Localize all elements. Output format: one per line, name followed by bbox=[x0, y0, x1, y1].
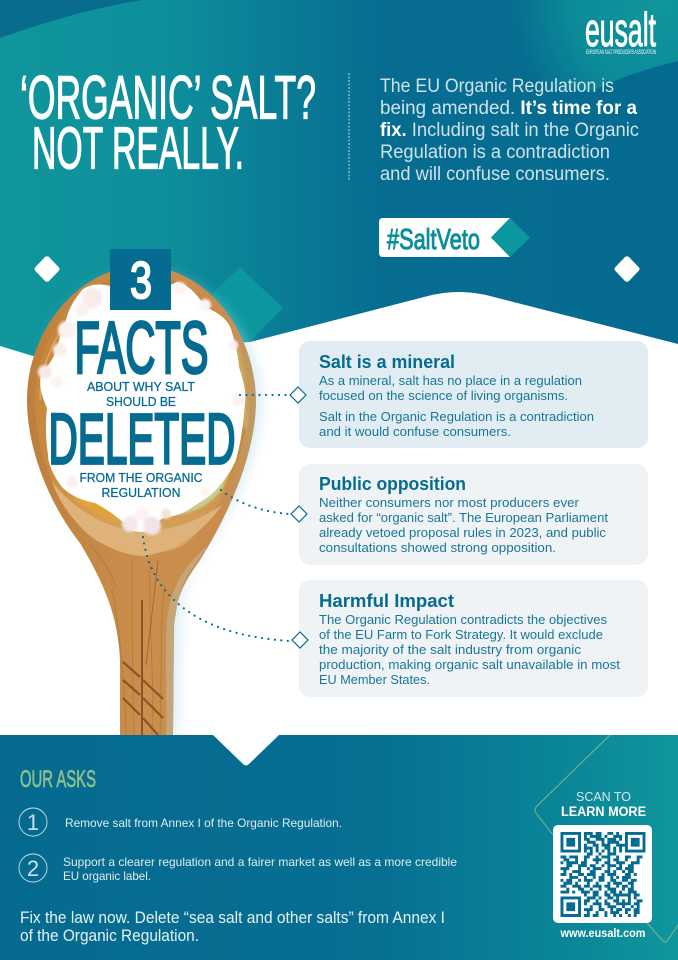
scan to learn more bbox=[561, 789, 646, 819]
icon: white diamond left bbox=[34, 256, 60, 282]
panel: public opposition: already vetoed proposal rules in 2023, and public bbox=[319, 526, 606, 540]
title: ‘ORGANIC’ SALT? bbox=[20, 64, 316, 132]
call to action bbox=[20, 909, 445, 945]
ask 1: Remove salt from Annex I of the Organic Regulation. bbox=[65, 816, 342, 830]
spoon headline: DELETED bbox=[48, 400, 236, 480]
intro text block: The EU Organic Regulation is bbox=[380, 76, 614, 97]
icon: white diamond right bbox=[614, 256, 640, 282]
panel: public opposition: asked for “organic salt”. The European Parliament bbox=[319, 511, 609, 525]
icon: connector diamond 3 bbox=[292, 632, 308, 648]
ask 2: Support a clearer regulation and a fairer market as well as a more credible bbox=[63, 855, 457, 869]
3 number box: 3 bbox=[130, 252, 152, 310]
hashtag badge: #SaltVeto bbox=[387, 224, 480, 256]
intro text block: being amended. It’s time for a bbox=[380, 98, 637, 119]
panel: harmful impact bbox=[299, 580, 648, 697]
QR code bbox=[553, 825, 652, 923]
panel: salt is a mineral: Salt in the Organic Regulation is a contradiction bbox=[319, 410, 594, 424]
connector: dotted line to fact 2 bbox=[221, 490, 289, 514]
panel: salt is a mineral: As a mineral, salt has no place in a regulation bbox=[319, 374, 582, 388]
spoon headline bbox=[48, 308, 236, 500]
intro text block bbox=[380, 76, 639, 185]
white page area bbox=[0, 292, 678, 740]
panel: salt is a mineral: and it would confuse consumers. bbox=[319, 425, 511, 439]
intro text block: and will confuse consumers. bbox=[380, 164, 610, 185]
panel: harmful impact: of the EU Farm to Fork Strategy. It would exclude bbox=[319, 628, 603, 642]
title: NOT REALLY. bbox=[32, 116, 244, 182]
panel: harmful impact: production, making organic salt unavailable in most bbox=[319, 658, 621, 672]
heading: our asks: OUR ASKS bbox=[20, 766, 96, 793]
connector: dotted line to fact 1 bbox=[240, 394, 288, 396]
spoon headline: ABOUT WHY SALT bbox=[87, 380, 195, 394]
ask 2: 2 bbox=[27, 856, 39, 881]
3 number box bbox=[110, 249, 171, 310]
ask 1: 1 bbox=[27, 810, 39, 835]
ask 2 bbox=[19, 854, 457, 883]
spoon headline: FACTS bbox=[74, 308, 208, 389]
panel: public opposition bbox=[299, 464, 648, 565]
icon: connector diamond 2 bbox=[291, 506, 307, 522]
panel: public opposition: Neither consumers nor most producers ever bbox=[319, 496, 579, 510]
call to action: Fix the law now. Delete “sea salt and other salts” from Annex I bbox=[20, 909, 445, 927]
bottom band bbox=[0, 735, 678, 960]
icon: connector diamond 1 bbox=[290, 387, 306, 403]
intro text block: fix. Including salt in the Organic bbox=[380, 120, 639, 141]
spoon headline: SHOULD BE bbox=[106, 395, 176, 409]
panel: harmful impact: Harmful Impact bbox=[319, 591, 454, 611]
hashtag badge bbox=[379, 218, 530, 257]
spoon headline: REGULATION bbox=[102, 486, 180, 500]
panel: salt is a mineral bbox=[299, 341, 648, 448]
spoon headline: FROM THE ORGANIC bbox=[80, 471, 202, 485]
green diamond outline bbox=[535, 735, 678, 942]
title bbox=[20, 64, 316, 182]
divider bbox=[348, 73, 350, 181]
website url: www.eusalt.com bbox=[560, 928, 646, 940]
salt pile bbox=[38, 282, 245, 535]
call to action: of the Organic Regulation. bbox=[20, 927, 199, 945]
background: top gradient panel bbox=[0, 0, 678, 360]
intro text block: Regulation is a contradiction bbox=[380, 142, 610, 163]
ask 2: EU organic label. bbox=[63, 869, 151, 883]
ask 1 bbox=[19, 808, 342, 836]
connector: dotted line to fact 3 bbox=[143, 537, 290, 641]
panel: harmful impact: EU Member States. bbox=[319, 673, 430, 687]
panel: salt is a mineral: Salt is a mineral bbox=[319, 352, 455, 372]
panel: harmful impact: The Organic Regulation contradicts the objectives bbox=[319, 613, 607, 627]
panel: harmful impact: the majority of the salt industry from organic bbox=[319, 643, 581, 657]
scan to learn more: LEARN MORE bbox=[561, 804, 646, 819]
panel: public opposition: Public opposition bbox=[319, 474, 466, 494]
scan to learn more: SCAN TO bbox=[576, 789, 631, 804]
wooden spoon with salt bbox=[27, 266, 261, 735]
panel: public opposition: consultations showed strong opposition. bbox=[319, 541, 556, 555]
panel: salt is a mineral: focused on the science of living organisms. bbox=[319, 389, 568, 403]
teal diamond behind spoon bbox=[197, 267, 283, 352]
